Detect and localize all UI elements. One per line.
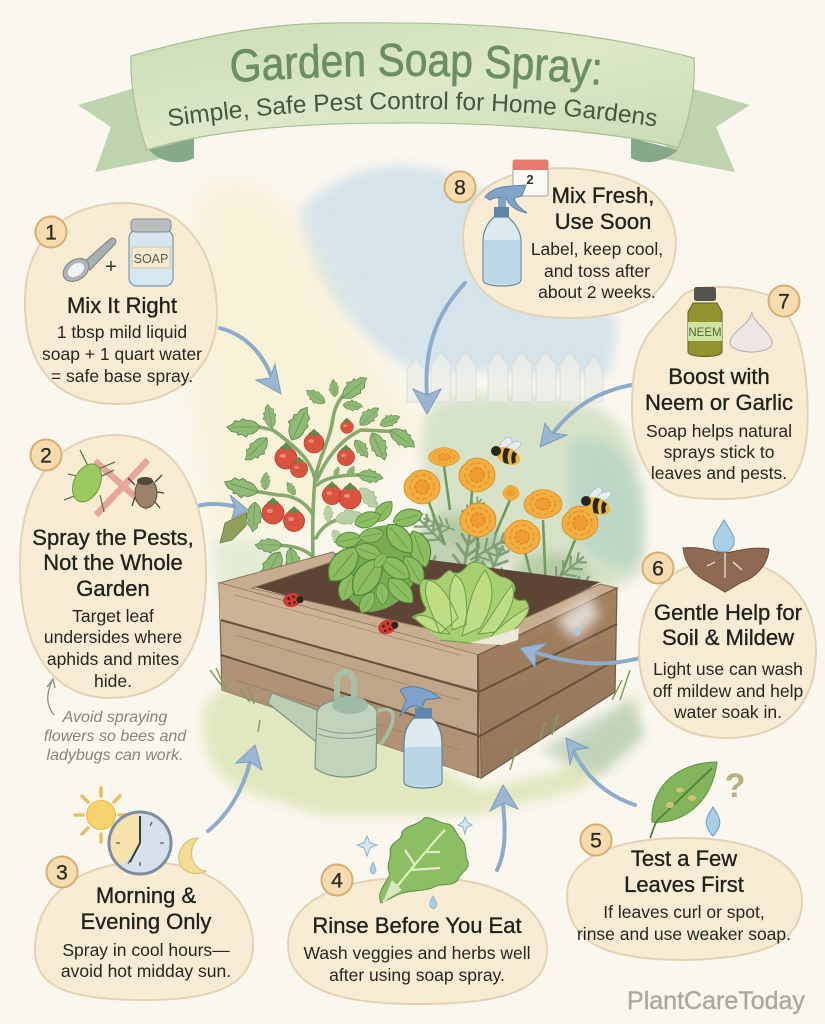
panel 7: boost with neem or garlic [632,286,808,499]
step number 1 [36,216,66,248]
step number 5: 5 [590,830,602,852]
heading [654,600,802,650]
body text: Spray in cool hours— [62,940,230,960]
title text: Garden Soap Spray: [232,43,600,92]
heading: Spray the Pests, [32,525,194,550]
body text: Wash veggies and herbs well [304,943,530,963]
plus sign: + [105,256,117,278]
arrow: step 5 to bed [566,738,635,805]
step number 8: 8 [454,176,466,200]
heading: Neem or Garlic [645,390,793,415]
icon: soap jar: SOAP [134,252,168,266]
panel 3: morning and evening [35,788,253,1000]
body text: = safe base spray. [51,366,193,386]
step number 7 [768,286,800,316]
heading: Boost with [668,364,770,389]
body text: water soak in. [673,702,782,722]
icon: test leaf [650,762,717,838]
tomato plant [220,371,420,590]
body text [42,322,202,386]
heading: Morning & [96,883,196,908]
marigolds [395,448,598,624]
body text: leaves and pests. [651,463,787,483]
note: avoid spraying flowers [44,679,187,764]
panel 2: spray the pests [20,435,206,698]
panel 4: rinse before you eat [288,817,547,1004]
icon: pests crossed out [64,450,164,515]
title banner [78,22,750,172]
panel 5: test a few leaves [567,762,802,960]
body text: Target leaf [72,606,154,626]
note text: ladybugs can work. [47,747,183,764]
lettuce [412,562,529,645]
arrow: step 8 to garden [413,283,465,414]
body text [653,659,803,722]
icon: neem bottle [688,287,722,356]
icon: moon [179,838,206,874]
step number 1: 1 [45,222,57,244]
watercolor garden backdrop [192,165,645,815]
step number 3 [46,856,78,888]
step number 3: 3 [56,862,68,884]
heading: Test a Few [631,846,737,871]
heading [645,364,793,415]
panel 1: mix it right [25,203,217,404]
body text: avoid hot midday sun. [61,961,231,981]
icon: clock [109,812,171,874]
note text [44,709,187,764]
spray bottle [400,687,442,788]
heading: Mix Fresh, [552,183,654,208]
soil and planter box [219,548,617,778]
body text: and toss after [544,261,650,281]
body text [304,943,530,985]
step number 2: 2 [40,444,52,468]
heading: Garden [76,576,150,601]
body text: rinse and use weaker soap. [577,924,791,944]
small curved arrow [47,679,55,715]
body text [531,239,663,302]
basil [321,497,436,616]
heading [552,183,654,234]
watering can [268,672,393,777]
ladybugs [282,591,400,637]
icon: water drop [706,807,720,836]
icon: neem bottle: NEEM [688,327,722,339]
heading [624,846,744,897]
banner body [131,23,694,150]
icon: calendar: 2 [526,172,534,187]
heading: Not the Whole [43,550,183,575]
icon: soil with water drop [683,520,769,592]
body text: Label, keep cool, [531,239,663,259]
body text: about 2 weeks. [538,282,656,302]
heading: Evening Only [81,909,211,934]
body text [577,902,791,944]
step number 6 [642,552,674,584]
raised garden bed scene [210,371,630,788]
body text: aphids and mites [47,649,179,669]
icon: rinsed lettuce leaf [357,817,472,909]
grass tufts [210,668,630,770]
body text: soap + 1 quart water [42,344,202,364]
heading [32,525,194,601]
heading: Soil & Mildew [662,625,794,650]
heading: Gentle Help for [654,600,802,625]
body text [44,606,182,691]
subtitle text: Simple, Safe Pest Control for Home Gardens [168,92,656,126]
body text: Light use can wash [653,659,803,679]
body text: hide. [94,671,132,691]
body text: 1 tbsp mild liquid [57,322,187,342]
step number 8 [444,172,476,202]
icon: sun [75,788,128,842]
step number 6: 6 [652,558,664,580]
heading: Use Soon [555,209,651,234]
icon: garlic [730,312,772,352]
body text: sprays stick to [664,442,774,462]
panel 8: mix fresh [444,160,676,318]
body text [646,421,792,483]
step number 4: 4 [331,870,343,892]
fence [407,352,603,402]
body text: off mildew and help [653,681,803,701]
right ribbon tail [631,88,750,172]
panel 6: soil and mildew [639,520,816,738]
step number 5 [580,824,612,856]
bees [491,435,613,519]
arrow: step 2 to leaf [180,495,248,518]
arrow: step 7 to bee [540,384,637,447]
body text: undersides where [44,627,182,647]
icon: question mark: ? [725,767,745,805]
arrow: step 3 to can [208,745,262,831]
icon: spoon [59,238,116,286]
icon: soap jar [129,219,173,286]
heading: Leaves First [624,872,744,897]
icon: spray bottle [483,185,527,286]
heading: Mix It Right [67,293,177,318]
note text: flowers so bees and [44,728,187,745]
step number 7: 7 [778,290,790,314]
icon: calendar [513,160,548,196]
arrow: step 6 to mildew [520,643,650,667]
body text: after using soap spray. [329,965,505,985]
step number 2 [30,440,62,470]
note text: Avoid spraying [62,709,167,726]
arrow: step 4 to bed [490,785,518,870]
watermark: PlantCareToday: PlantCareToday [627,987,805,1015]
body text: Soap helps natural [646,421,792,441]
step number 4 [322,864,352,896]
body text: If leaves curl or spot, [603,902,765,922]
left ribbon tail [78,88,194,172]
arrow: step 1 to plant [220,328,281,394]
heading [81,883,211,934]
body text [61,940,231,981]
heading: Rinse Before You Eat [312,913,522,938]
